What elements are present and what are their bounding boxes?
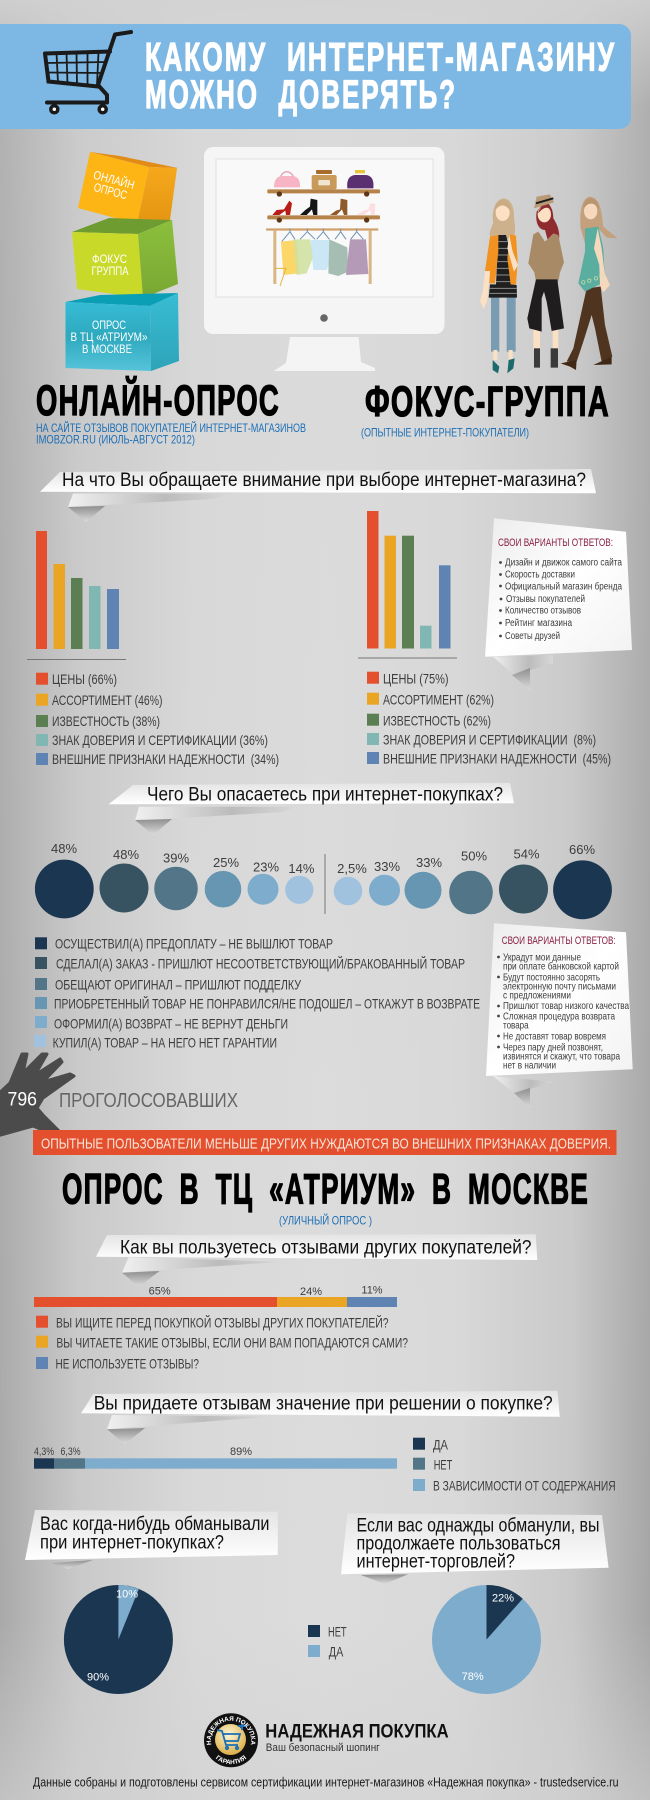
callout: own answers 1: Количество отзывов xyxy=(505,606,581,617)
legend: fears: СДЕЛАЛ(А) ЗАКАЗ - ПРИШЛЮТ НЕСООТВЕТСТВУЮЩИЙ/БРАКОВАННЫЙ ТОВАР xyxy=(56,954,465,971)
bubble chart: fears: 33% xyxy=(374,859,400,874)
logo badge xyxy=(204,1713,258,1768)
question ribbon 1 xyxy=(40,469,596,522)
callout: own answers 2: Через пару дней позвонят, xyxy=(503,1042,603,1053)
pie chart: deceived xyxy=(64,1585,173,1694)
logo badge: НАДЕЖНАЯ ПОКУПКА xyxy=(206,1716,256,1745)
stacked bar: review importance: 89% xyxy=(230,1446,252,1458)
cube: online survey xyxy=(78,152,178,224)
woman in hat xyxy=(527,194,564,368)
callout: own answers 2: с предложениями xyxy=(503,990,571,1001)
pie chart: deceived: 10% xyxy=(116,1588,138,1600)
heading: online survey xyxy=(36,376,306,446)
legend: fears: ОСУЩЕСТВИЛ(А) ПРЕДОПЛАТУ – НЕ ВЫШЛЮТ ТОВАР xyxy=(55,935,333,951)
question ribbon 3: Как вы пользуетесь отзывами других покупателей? xyxy=(120,1237,532,1258)
header banner xyxy=(0,24,631,129)
legend: review usage xyxy=(36,1314,408,1372)
question ribbon 6: продолжаете пользоваться xyxy=(356,1533,560,1554)
text: focus group subtitle: (ОПЫТНЫЕ ИНТЕРНЕТ-ПОКУПАТЕЛИ) xyxy=(361,426,529,440)
pie chart: continue shopping xyxy=(432,1585,541,1694)
legend: fears xyxy=(34,935,480,1050)
legend: review usage: НЕ ИСПОЛЬЗУЕТЕ ОТЗЫВЫ? xyxy=(56,1356,199,1372)
legend: fears: КУПИЛ(А) ТОВАР – НА НЕГО НЕТ ГАРАНТИИ xyxy=(53,1034,277,1050)
icon: logo cart xyxy=(217,1722,246,1749)
question ribbon 6: интернет-торговлей? xyxy=(356,1551,515,1572)
bar chart: online survey xyxy=(27,531,126,660)
legend: online survey: АССОРТИМЕНТ (46%) xyxy=(52,692,162,708)
question ribbon 6 xyxy=(341,1513,609,1584)
bubble chart: fears: 48% xyxy=(113,847,139,862)
legend: pies: ДА xyxy=(329,1644,344,1660)
icon: shopping cart xyxy=(45,32,131,113)
text: online survey source xyxy=(36,420,306,446)
pie chart: deceived: 90% xyxy=(87,1672,109,1684)
bubble chart: fears: 2,5% xyxy=(337,861,367,876)
callout: own answers 2: товара xyxy=(503,1020,529,1031)
heading: online survey: ОНЛАЙН-ОПРОС xyxy=(36,376,280,425)
legend: fears: ОФОРМИЛ(А) ВОЗВРАТ – НЕ ВЕРНУТ ДЕНЬГИ xyxy=(54,1015,288,1031)
legend: fears: ПРИОБРЕТЕННЫЙ ТОВАР НЕ ПОНРАВИЛСЯ/НЕ ПОДОШЕЛ – ОТКАЖУТ В ВОЗВРАТЕ xyxy=(54,995,480,1012)
callout: own answers 1: Дизайн и движок самого сайта xyxy=(505,558,622,569)
legend: review usage: ВЫ ЧИТАЕТЕ ТАКИЕ ОТЗЫВЫ, ЕСЛИ ОНИ ВАМ ПОПАДАЮТСЯ САМИ? xyxy=(56,1334,408,1350)
callout: own answers 1: СВОИ ВАРИАНТЫ ОТВЕТОВ: xyxy=(498,537,613,549)
text: voters: ПРОГОЛОСОВАВШИХ xyxy=(59,1090,238,1112)
legend: online survey xyxy=(36,671,279,767)
logo wordmark: НАДЕЖНАЯ ПОКУПКА xyxy=(265,1722,449,1743)
cube: online survey: ОНЛАЙН xyxy=(92,167,136,192)
monitor with online store xyxy=(204,147,444,371)
legend: focus group: ЦЕНЫ (75%) xyxy=(383,670,449,686)
bubble chart: fears: 54% xyxy=(513,846,540,861)
callout: own answers 1 xyxy=(485,518,632,690)
legend: online survey: ИЗВЕСТНОСТЬ (38%) xyxy=(52,713,160,729)
question ribbon 2: Чего Вы опасаетесь при интернет-покупках? xyxy=(147,785,503,806)
question ribbon 4 xyxy=(81,1391,560,1444)
callout: own answers 1: Рейтинг магазина xyxy=(505,618,572,629)
legend: fears: ОБЕЩАЮТ ОРИГИНАЛ – ПРИШЛЮТ ПОДДЕЛКУ xyxy=(55,976,301,992)
cube: Atrium survey xyxy=(66,293,179,371)
pie chart: continue shopping: 22% xyxy=(492,1593,514,1605)
legend: pies xyxy=(308,1624,347,1660)
bubble chart: fears: 25% xyxy=(213,855,239,870)
woman in teal dress xyxy=(561,197,618,370)
callout: own answers 2: Украдут мои данные xyxy=(503,952,581,963)
bubble chart: fears: 39% xyxy=(163,850,189,865)
cube: focus group xyxy=(72,218,178,298)
cube: focus group: ГРУППА xyxy=(92,264,128,278)
callout: own answers 2: при оплате банковской картой xyxy=(503,960,619,972)
question ribbon 5: Вас когда-нибудь обманывали xyxy=(40,1514,270,1535)
cube: Atrium survey: В ТЦ «АТРИУМ» xyxy=(70,330,148,344)
bubble chart: fears: 23% xyxy=(253,859,279,874)
stacked bar: review importance xyxy=(34,1446,397,1469)
icon: shelves with bags, shoes and clothes xyxy=(266,170,380,286)
callout: own answers 2: электронную почту письмами xyxy=(503,981,616,992)
text: online survey source: НА САЙТЕ ОТЗЫВОВ ПОКУПАТЕЛЕЙ ИНТЕРНЕТ-МАГАЗИНОВ xyxy=(36,420,306,435)
bar chart: focus group xyxy=(358,511,457,658)
stacked bar: review importance: 4,3% xyxy=(34,1446,54,1458)
bubble chart: fears: 48% xyxy=(51,841,77,856)
stacked bar: review importance: 6,3% xyxy=(60,1446,81,1458)
question ribbon 4: Вы придаете отзывам значение при решении о покупке? xyxy=(94,1393,553,1414)
text: online survey source: IMOBZOR.RU (ИЮЛЬ-АВГУСТ 2012) xyxy=(36,432,195,446)
logo wordmark xyxy=(265,1722,449,1754)
cube: focus group: ФОКУС xyxy=(92,252,127,266)
legend: online survey: ВНЕШНИЕ ПРИЗНАКИ НАДЕЖНОСТИ (34%) xyxy=(52,751,279,767)
callout: own answers 2: Сложная процедура возврата xyxy=(503,1011,615,1022)
callout: own answers 1: Отзывы покупателей xyxy=(506,594,585,605)
icon: hand with vote count xyxy=(0,1054,74,1136)
callout: own answers 1: Советы друзей xyxy=(505,631,560,642)
callout: own answers 2: Будут постоянно засорять xyxy=(503,972,600,983)
cube: Atrium survey: ОПРОС xyxy=(92,318,126,332)
callout: own answers 2: нет в наличии xyxy=(503,1060,556,1071)
legend: review importance: НЕТ xyxy=(434,1456,453,1472)
bubble chart: fears xyxy=(35,841,612,919)
cubes: three surveys xyxy=(66,152,179,371)
woman in orange jacket xyxy=(480,198,518,373)
heading: focus group xyxy=(361,378,610,440)
bubble chart: fears: 14% xyxy=(288,861,315,876)
bubble chart: fears: 33% xyxy=(416,855,442,870)
stacked bar: review usage: 24% xyxy=(300,1286,322,1298)
legend: review usage: ВЫ ИЩИТЕ ПЕРЕД ПОКУПКОЙ ОТЗЫВЫ ДРУГИХ ПОКУПАТЕЛЕЙ? xyxy=(56,1314,389,1331)
legend: online survey: ЦЕНЫ (66%) xyxy=(52,671,117,687)
bubble chart: fears: 66% xyxy=(569,842,595,857)
question ribbon 6: Если вас однажды обманули, вы xyxy=(356,1516,600,1537)
title: МОЖНО ДОВЕРЯТЬ? xyxy=(145,73,457,117)
title xyxy=(145,36,616,117)
stacked bar: review usage: 65% xyxy=(149,1285,171,1297)
question ribbon 3 xyxy=(96,1234,537,1287)
legend: focus group: АССОРТИМЕНТ (62%) xyxy=(383,691,494,707)
callout: own answers 2: извинятся и скажут, что товара xyxy=(503,1051,620,1062)
legend: pies: НЕТ xyxy=(328,1624,347,1640)
logo wordmark: Ваш безопасный шопинг xyxy=(266,1742,380,1754)
question ribbon 2 xyxy=(109,783,514,835)
callout: own answers 1: Скорость доставки xyxy=(505,570,575,581)
icon: three women customers xyxy=(480,194,618,373)
cube: Atrium survey: В МОСКВЕ xyxy=(82,342,132,356)
question ribbon 5 xyxy=(25,1510,278,1569)
stacked bar: review usage xyxy=(34,1284,397,1307)
question ribbon 5: при интернет-покупках? xyxy=(40,1532,224,1553)
text: street survey subtitle: (УЛИЧНЫЙ ОПРОС ) xyxy=(279,1212,372,1227)
callout: own answers 2 xyxy=(486,923,633,1108)
icon: hand with vote count: 796 xyxy=(8,1090,37,1111)
stacked bar: review usage: 11% xyxy=(361,1284,383,1296)
bubble chart: fears: 50% xyxy=(461,849,487,864)
question ribbon 1: На что Вы обращаете внимание при выборе интернет-магазина? xyxy=(62,470,586,491)
callout: own answers 2: Не доставят товар вовремя xyxy=(503,1031,606,1042)
cube: online survey: ОПРОС xyxy=(92,180,129,202)
legend: review importance: ДА xyxy=(433,1436,449,1452)
pie chart: continue shopping: 78% xyxy=(462,1671,484,1683)
logo badge: ГАРАНТИЯ xyxy=(216,1755,246,1764)
callout: own answers 1: Официальный магазин бренда xyxy=(505,580,622,592)
legend: focus group: ИЗВЕСТНОСТЬ (62%) xyxy=(383,712,491,728)
legend: focus group xyxy=(367,670,611,766)
banner: key finding xyxy=(33,1130,616,1155)
legend: online survey: ЗНАК ДОВЕРИЯ И СЕРТИФИКАЦИИ (36%) xyxy=(52,732,268,748)
legend: review importance xyxy=(413,1436,616,1494)
